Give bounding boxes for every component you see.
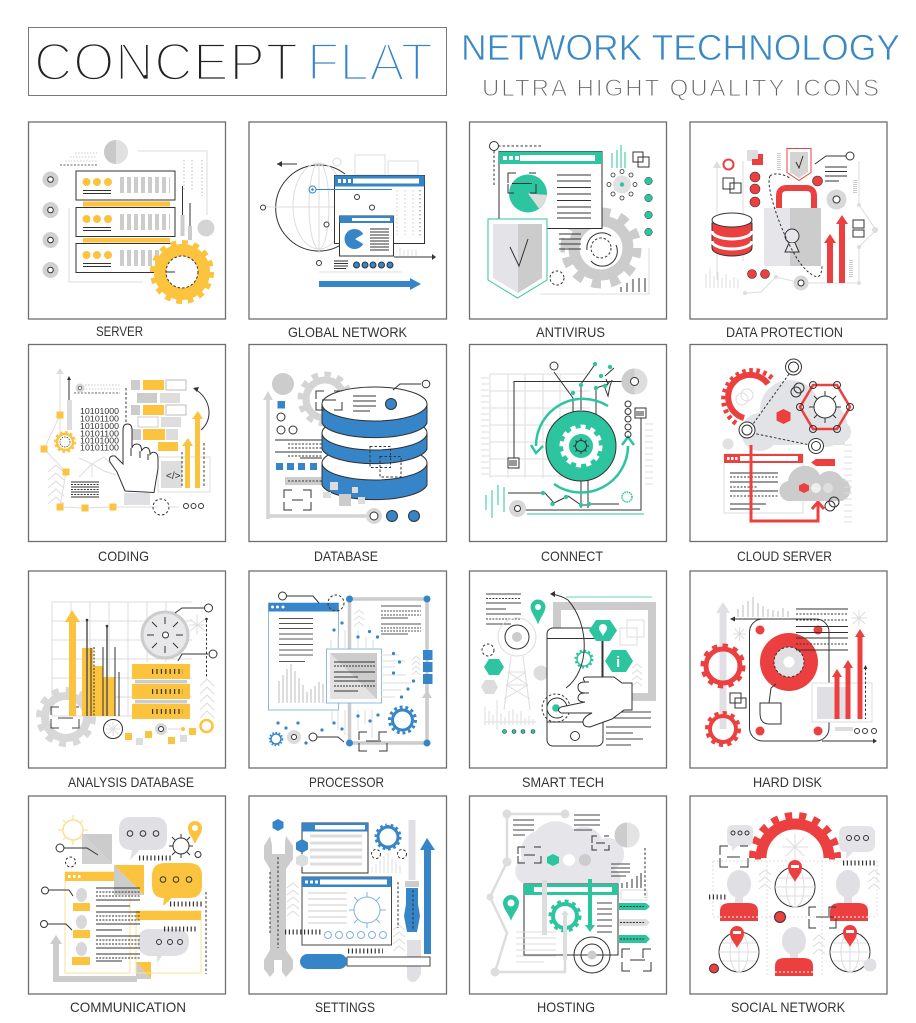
- top window: [296, 823, 368, 873]
- document window: [724, 454, 803, 513]
- arrows and dots: [319, 248, 436, 290]
- title box: concept flat: [28, 28, 446, 96]
- bottom discs: [366, 508, 420, 524]
- lower details: [104, 618, 214, 745]
- panel: coding: [28, 344, 226, 564]
- padlock: [764, 174, 822, 277]
- yellow triangles: [114, 865, 151, 979]
- label: PROCESSOR: [309, 774, 384, 790]
- text lines and pie: [513, 815, 640, 876]
- panel: cloud server: [690, 344, 887, 564]
- grey gear with frame: [39, 690, 93, 744]
- pointing hand: [110, 424, 158, 505]
- code bricks: [126, 380, 186, 451]
- grey grid: [52, 602, 192, 716]
- binary code: 10101000: [80, 406, 119, 416]
- bottom pill bar: [287, 882, 430, 969]
- pin: [503, 895, 519, 921]
- scatter squares: [323, 482, 365, 506]
- browser window: [499, 152, 602, 228]
- chips: [508, 408, 646, 468]
- arrows: [550, 591, 652, 688]
- speech bubbles: [720, 825, 875, 867]
- dashed connector: [490, 142, 543, 186]
- blue up arrow: [420, 838, 435, 954]
- label: COMMUNICATION: [70, 999, 186, 1015]
- central text lines: [96, 888, 140, 961]
- panel: social network: [690, 796, 887, 1015]
- yellow server stack: [132, 664, 190, 719]
- label: SERVER: [96, 323, 143, 339]
- panel: analysis database: [28, 571, 226, 790]
- small grey cloud: [779, 445, 852, 522]
- yellow gear: [153, 243, 211, 301]
- panel: smart tech: [470, 571, 666, 790]
- shield check: [787, 148, 854, 181]
- text lines top right: [381, 606, 421, 634]
- label: CODING: [98, 548, 149, 564]
- bottom dots: [153, 499, 204, 515]
- circular teal arrows: [531, 399, 634, 493]
- location pins and hexagons: i: [616, 654, 620, 671]
- grey frame: [553, 606, 652, 697]
- subheading: ultra hight quality icons: ULTRA HIGHT QUALITY ICONS: [482, 75, 879, 102]
- grey gear behind: [300, 374, 350, 424]
- title box: concept flat: FLAT: [307, 33, 433, 92]
- rotating arrows: [581, 228, 621, 268]
- label: DATABASE: [314, 548, 378, 564]
- shield with check: [488, 219, 547, 298]
- left status dots: [42, 172, 58, 278]
- red connector arrow: [751, 445, 835, 521]
- teal nodes: [541, 362, 612, 507]
- sun icon and pin: [139, 821, 202, 858]
- phone: [534, 628, 603, 746]
- label: HARD DISK: [753, 774, 823, 790]
- title box: concept flat: CONCEPT: [34, 33, 298, 92]
- panel: server: [28, 122, 226, 339]
- hand on touch: [542, 677, 651, 745]
- label: CLOUD SERVER: [737, 548, 832, 564]
- red hexagon sun: [796, 382, 854, 432]
- blue blocks: [423, 650, 432, 684]
- blue dots: [276, 621, 415, 745]
- grey discs: [509, 368, 648, 517]
- grey network lines: [706, 153, 878, 295]
- right tags: [619, 848, 650, 943]
- label: SETTINGS: [315, 999, 375, 1015]
- binary code: [80, 406, 119, 452]
- panel: global network: [249, 122, 446, 340]
- label: CONNECT: [541, 548, 603, 564]
- server racks: [76, 171, 175, 272]
- yellow gear: [56, 432, 74, 452]
- grey arrow and chart: [716, 597, 867, 729]
- dashed node links: [722, 359, 824, 454]
- panel: processor: [249, 571, 446, 790]
- main window: [285, 877, 392, 945]
- overlap squares: [730, 693, 746, 708]
- label: HOSTING: [537, 999, 595, 1015]
- big grey cloud: [741, 380, 851, 451]
- teal details: [486, 485, 644, 518]
- sun and triangles: [56, 815, 112, 867]
- red gear: [724, 371, 772, 424]
- grey frame: [346, 596, 432, 746]
- panel: settings: [249, 796, 446, 1015]
- main browser window: [260, 176, 424, 266]
- left window with people: [40, 872, 130, 973]
- yellow squares: [40, 412, 116, 512]
- label: SOCIAL NETWORK: [731, 999, 846, 1015]
- left arrows and nodes: [44, 368, 158, 508]
- grey arrow: [50, 935, 137, 982]
- network lines: [486, 810, 570, 976]
- gears and nodes: [270, 610, 420, 751]
- label: DATA PROTECTION: [726, 324, 843, 340]
- label: ANTIVIRUS: [536, 324, 605, 340]
- light grid: [481, 374, 653, 484]
- decorative nodes and arrows: [60, 140, 214, 282]
- browser window: [268, 592, 344, 710]
- label: GLOBAL NETWORK: [288, 324, 408, 340]
- panel: hosting: [470, 796, 666, 1015]
- blue gear and details: [372, 825, 406, 873]
- red dots: [748, 172, 822, 278]
- panel: database: [249, 344, 446, 564]
- label: SMART TECH: [522, 774, 604, 790]
- text lines: [486, 594, 521, 624]
- stacked cylinders: [316, 380, 430, 500]
- antenna tower: [484, 618, 536, 734]
- processor chip: [326, 630, 411, 738]
- panel: connect: [470, 344, 666, 564]
- panel: communication: [28, 796, 226, 1015]
- red dots and frame: [709, 863, 880, 973]
- drive body: [750, 619, 829, 741]
- wrench: [264, 819, 293, 977]
- code frame with arrows: </>: [166, 471, 181, 482]
- binary code: 10101100: [80, 428, 119, 438]
- yellow speech bubble: [152, 863, 206, 974]
- small chart window: [340, 216, 394, 256]
- location pins and hexagons: [481, 600, 633, 694]
- dashed grid: [713, 861, 877, 975]
- binary code: 10101000: [80, 421, 119, 431]
- small red and grey icons: [723, 150, 864, 290]
- people: [720, 870, 868, 976]
- side details: [540, 145, 652, 294]
- right window: [136, 911, 201, 973]
- red arch gear: [753, 816, 837, 860]
- panel: hard disk: [690, 571, 887, 790]
- platter: [760, 633, 818, 724]
- monitor chart: [812, 629, 876, 734]
- bar chart: [82, 619, 119, 716]
- binary code: 10101100: [80, 442, 119, 452]
- panel: data protection: [690, 122, 887, 340]
- red gears: [703, 646, 743, 745]
- panel: antivirus: [470, 122, 666, 340]
- grey speech bubble: [119, 817, 167, 860]
- left icons: [263, 373, 368, 519]
- list lines: [730, 609, 877, 744]
- cloud: [515, 821, 624, 885]
- large grey gear: [565, 212, 637, 284]
- target rings: [574, 937, 651, 973]
- yellow arrow: [65, 610, 80, 716]
- screwdriver: [404, 820, 421, 982]
- red arrows: [824, 215, 848, 283]
- circuit lines: [508, 362, 641, 510]
- dial: [142, 604, 217, 661]
- browser window: [516, 879, 618, 962]
- code frame with arrows: [158, 387, 210, 492]
- globe: [263, 155, 418, 253]
- binary code: 10101000: [80, 436, 119, 446]
- globes with pins: [719, 860, 870, 972]
- label: ANALYSIS DATABASE: [68, 774, 194, 790]
- red database: [712, 213, 752, 256]
- heading: network technology: NETWORK TECHNOLOGY: [461, 27, 900, 68]
- binary code: 10101100: [80, 414, 119, 424]
- central teal disc with gear: [546, 411, 616, 481]
